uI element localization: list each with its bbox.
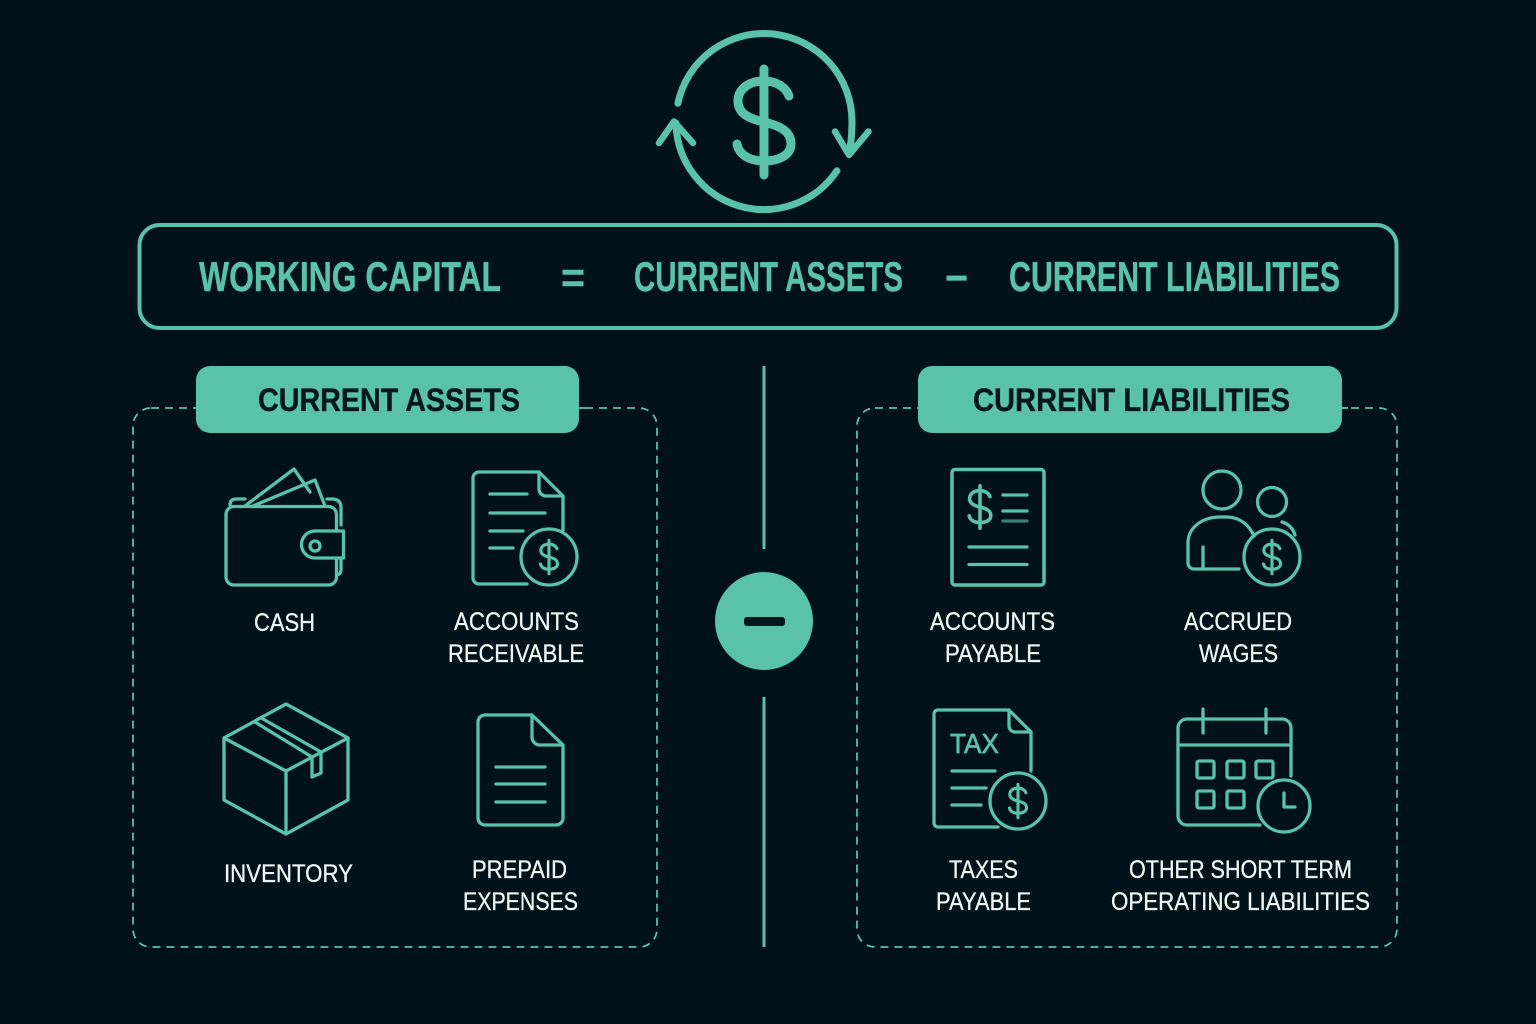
formula term: working capital: WORKING CAPITAL bbox=[199, 253, 501, 300]
icon: tax document with dollar coin: TAX bbox=[950, 728, 999, 759]
label: accrued wages: ACCRUED bbox=[1184, 608, 1292, 636]
icon: dollar sign in circular arrows bbox=[659, 33, 868, 210]
label: accounts receivable bbox=[448, 608, 584, 668]
label: accounts payable bbox=[930, 608, 1055, 668]
label: prepaid expenses bbox=[463, 856, 578, 916]
label: accounts payable: PAYABLE bbox=[945, 640, 1041, 668]
icon: invoice with dollar coin bbox=[473, 472, 577, 585]
formula term: current assets: CURRENT ASSETS bbox=[634, 253, 903, 300]
label: other short term operating liabilities: OPERATING LIABILITIES bbox=[1111, 888, 1370, 916]
label: other short term operating liabilities: OTHER SHORT TERM bbox=[1129, 856, 1352, 884]
label: taxes payable bbox=[936, 856, 1031, 916]
icon: people with dollar coin bbox=[1188, 471, 1300, 585]
formula box bbox=[140, 225, 1396, 328]
icon: document bbox=[478, 715, 563, 825]
formula term: current liabilities: CURRENT LIABILITIES bbox=[1009, 253, 1340, 300]
icon: cardboard box bbox=[224, 704, 348, 834]
label: accounts payable: ACCOUNTS bbox=[930, 608, 1055, 636]
label: accrued wages: WAGES bbox=[1199, 640, 1278, 668]
center divider with minus symbol bbox=[715, 366, 813, 947]
icon: wallet bbox=[226, 469, 344, 585]
label: prepaid expenses: EXPENSES bbox=[463, 888, 578, 916]
label: other short term operating liabilities bbox=[1111, 856, 1370, 916]
panel heading: current assets bbox=[196, 366, 579, 433]
label: accrued wages bbox=[1184, 608, 1292, 668]
label: taxes payable: PAYABLE bbox=[936, 888, 1031, 916]
label: accounts receivable: RECEIVABLE bbox=[448, 640, 584, 668]
icon: bill with dollar sign bbox=[952, 470, 1044, 585]
icon: calendar with clock bbox=[1178, 709, 1310, 832]
panel heading: current liabilities: CURRENT LIABILITIES bbox=[973, 382, 1290, 418]
label: inventory: INVENTORY bbox=[224, 860, 353, 888]
equals sign: = bbox=[561, 254, 585, 301]
panel: current liabilities bbox=[857, 366, 1397, 947]
icon: tax document with dollar coin bbox=[934, 710, 1046, 829]
label: prepaid expenses: PREPAID bbox=[472, 856, 567, 884]
minus sign: − bbox=[945, 254, 968, 301]
panel heading: current liabilities bbox=[918, 366, 1342, 433]
label: accounts receivable: ACCOUNTS bbox=[454, 608, 579, 636]
label: taxes payable: TAXES bbox=[949, 856, 1018, 884]
panel heading: current assets: CURRENT ASSETS bbox=[258, 382, 520, 418]
label: cash: CASH bbox=[254, 609, 315, 637]
panel: current assets bbox=[133, 366, 657, 947]
